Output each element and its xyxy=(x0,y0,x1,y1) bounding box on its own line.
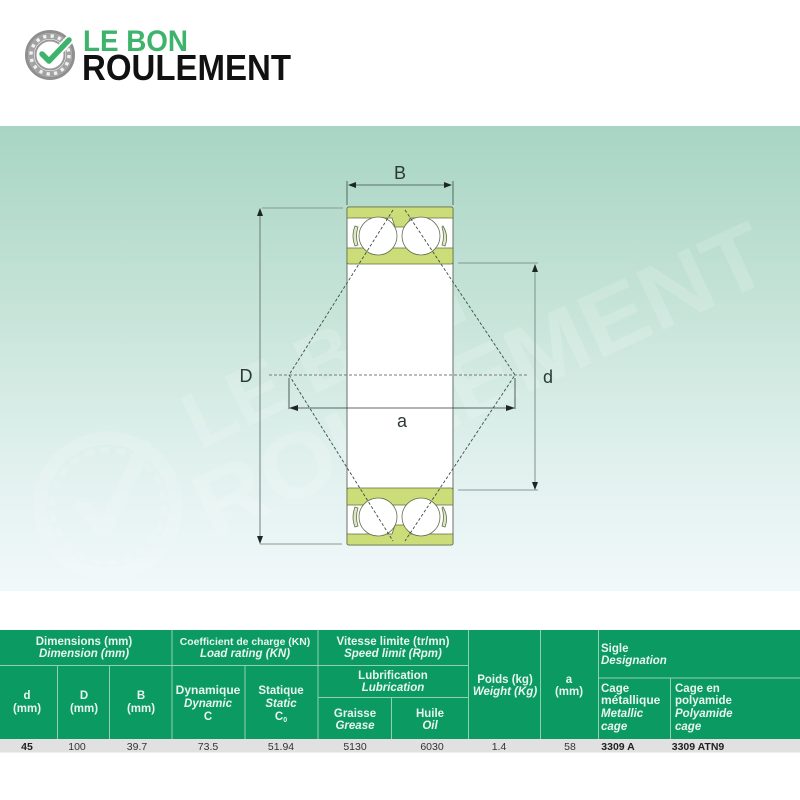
dimension B xyxy=(347,163,453,205)
data row: 39.7 xyxy=(127,741,147,753)
header: static: C xyxy=(275,711,283,723)
header: metallic cage: Metallic xyxy=(601,708,644,720)
panel: bearing diagram background xyxy=(0,126,800,591)
data row: 6030 xyxy=(420,741,444,753)
header: load rating: Load rating (KN) xyxy=(200,648,290,660)
dimension a xyxy=(289,378,515,431)
dimension d xyxy=(458,263,553,490)
bottom bearing section xyxy=(347,488,453,545)
header: D xyxy=(70,690,98,715)
logo text: ROULEMENT xyxy=(82,47,291,88)
header: dimensions: Dimensions (mm) xyxy=(36,636,132,648)
diagram: double row angular contact bearing xyxy=(347,207,453,545)
bearing body xyxy=(347,207,453,545)
header: static: Statique xyxy=(258,685,304,697)
table: bearing specifications xyxy=(0,630,800,753)
dimension B: B xyxy=(394,163,406,183)
icon: bearing with check mark xyxy=(26,32,74,78)
table grid xyxy=(0,630,800,739)
header: load rating xyxy=(180,637,310,660)
header: metallic cage: Cage xyxy=(601,683,629,695)
watermark: text: LE BON xyxy=(168,253,479,465)
header: speed limit: Speed limit (Rpm) xyxy=(344,648,442,660)
header: a: (mm) xyxy=(555,686,583,698)
logo text: LE BON xyxy=(83,25,188,58)
table header background xyxy=(0,630,800,739)
header: weight xyxy=(473,674,537,698)
top bearing section xyxy=(347,207,453,264)
header: designation xyxy=(601,643,667,667)
header: polyamide cage: cage xyxy=(675,721,702,733)
header: dynamic xyxy=(176,683,241,723)
header: oil xyxy=(416,708,444,732)
header: static: 0 xyxy=(283,717,287,724)
header: grease: Grease xyxy=(335,720,375,732)
dimension d: d xyxy=(543,367,553,387)
header: dimensions xyxy=(36,636,132,660)
header: dynamic: Dynamic xyxy=(184,698,233,710)
header: lubrification: Lubrification xyxy=(358,670,428,682)
header: speed limit: Vitesse limite (tr/mn) xyxy=(337,636,450,648)
header: polyamide cage: Polyamide xyxy=(675,708,733,720)
data row: 51.94 xyxy=(268,741,294,753)
header: lubrification xyxy=(358,670,428,694)
header: grease: Graisse xyxy=(334,708,376,720)
header: designation: Designation xyxy=(601,655,667,667)
data row: 3309 ATN9 xyxy=(672,741,724,753)
header: dynamic: C xyxy=(204,711,212,723)
header: metallic cage: métallique xyxy=(601,693,661,707)
header: grease xyxy=(334,708,376,732)
header: B xyxy=(127,690,155,715)
header: d: (mm) xyxy=(13,703,41,715)
header: static: Static xyxy=(265,698,297,710)
data row: 1.4 xyxy=(492,741,506,753)
data row: 3309 A xyxy=(601,741,635,753)
data row xyxy=(21,741,724,753)
dimension D: D xyxy=(240,366,252,386)
logo: Le Bon Roulement xyxy=(26,25,291,88)
data row: 73.5 xyxy=(198,741,218,753)
header: dimensions: Dimension (mm) xyxy=(39,648,129,660)
dimension D xyxy=(240,208,343,544)
watermark: logo xyxy=(40,438,176,574)
header: B: B xyxy=(137,690,145,702)
data row: 45 xyxy=(21,741,33,753)
header: metallic cage: cage xyxy=(601,721,628,733)
contact angle dashed lines xyxy=(269,210,527,541)
header: weight: Poids (kg) xyxy=(477,674,533,686)
data row: 58 xyxy=(564,741,576,753)
header: metallic cage xyxy=(601,683,661,733)
header: D: (mm) xyxy=(70,703,98,715)
logo text xyxy=(82,25,291,88)
data row: 5130 xyxy=(343,741,367,753)
watermark: text: ROULEMENT xyxy=(177,203,784,558)
header: static xyxy=(258,685,304,724)
header: speed limit xyxy=(337,636,450,660)
header: polyamide cage: Cage en xyxy=(675,683,720,695)
data row: 100 xyxy=(68,741,86,753)
header: polyamide cage: polyamide xyxy=(675,695,732,707)
header: B: (mm) xyxy=(127,703,155,715)
header: D: D xyxy=(80,690,88,702)
header: a xyxy=(555,674,583,698)
header: oil: Huile xyxy=(416,708,444,720)
header: designation: Sigle xyxy=(601,643,628,655)
header: polyamide cage xyxy=(675,683,733,733)
header: dynamic: Dynamique xyxy=(176,683,241,697)
header: lubrification: Lubrication xyxy=(362,682,424,694)
header: d: d xyxy=(23,690,31,702)
dimension a: a xyxy=(397,411,408,431)
header: load rating: Coefficient de charge (KN) xyxy=(180,637,310,648)
header: a: a xyxy=(566,674,573,686)
header: d xyxy=(13,690,41,715)
header: weight: Weight (Kg) xyxy=(473,686,537,698)
header: oil: Oil xyxy=(422,720,438,732)
table row background xyxy=(0,739,800,752)
